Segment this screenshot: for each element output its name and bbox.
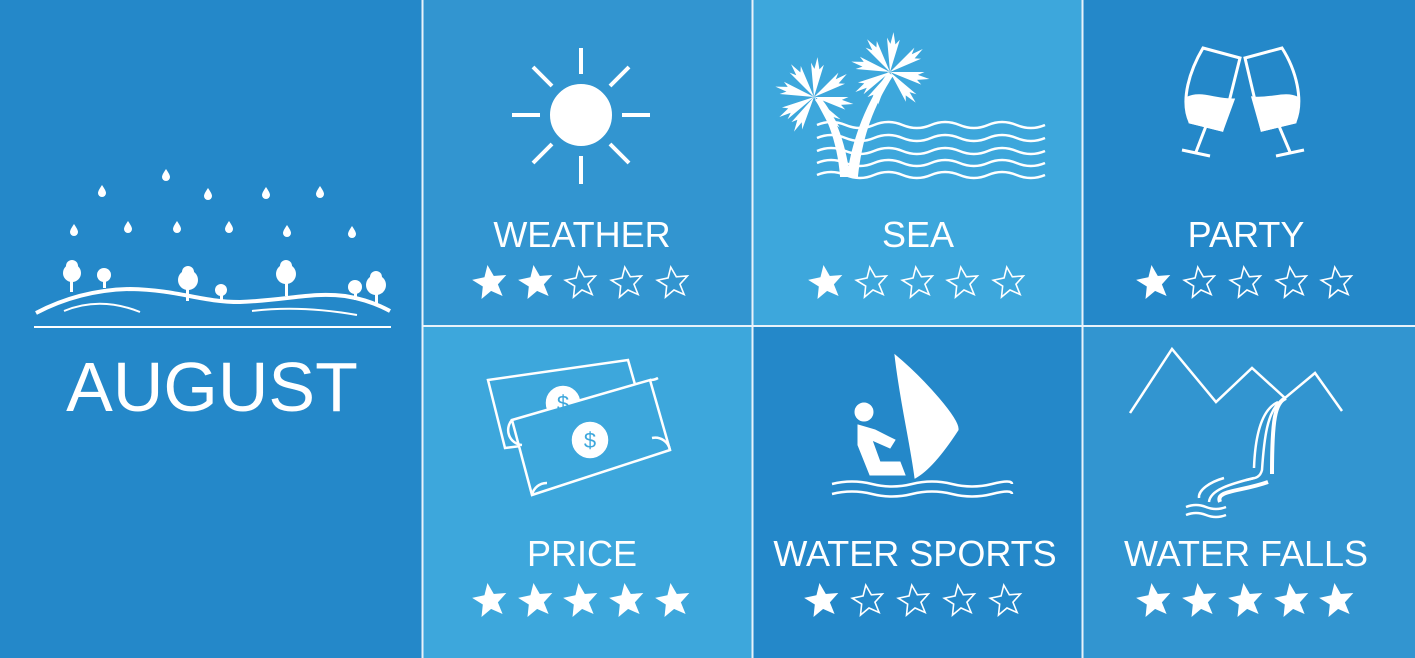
icon: sun <box>512 48 650 184</box>
panel: weather <box>473 48 690 298</box>
rating: price <box>473 583 690 616</box>
rating: sea <box>809 265 1026 298</box>
panel: water sports <box>773 355 1057 616</box>
heading: weather: WEATHER <box>493 214 671 255</box>
heading: water sports: WATER SPORTS <box>773 533 1057 574</box>
panel: water falls <box>1124 349 1368 616</box>
panel: price: $ <box>557 391 569 416</box>
icon: champagne glasses <box>1182 48 1304 156</box>
title: august: AUGUST <box>66 348 358 426</box>
rating: party <box>1137 265 1354 298</box>
panel backgrounds <box>422 0 1415 658</box>
panel: price <box>473 360 690 616</box>
icon: mountains and waterfall <box>1130 349 1342 517</box>
heading: sea: SEA <box>882 214 954 255</box>
heading: water falls: WATER FALLS <box>1124 533 1368 574</box>
heading: price: PRICE <box>527 533 637 574</box>
rating: weather <box>473 265 690 298</box>
panel: august <box>0 0 422 658</box>
rating: water falls <box>1137 583 1354 616</box>
heading: party: PARTY <box>1188 214 1304 255</box>
icon: palms and sea <box>774 32 1045 178</box>
icon: rainy landscape <box>34 169 391 327</box>
icon: windsurfer <box>832 355 1012 496</box>
rating: water sports <box>805 583 1023 616</box>
panel: party <box>1137 48 1354 298</box>
panel: sea <box>774 32 1045 298</box>
icon: banknotes <box>488 360 670 495</box>
panel: price: $ <box>584 428 596 453</box>
